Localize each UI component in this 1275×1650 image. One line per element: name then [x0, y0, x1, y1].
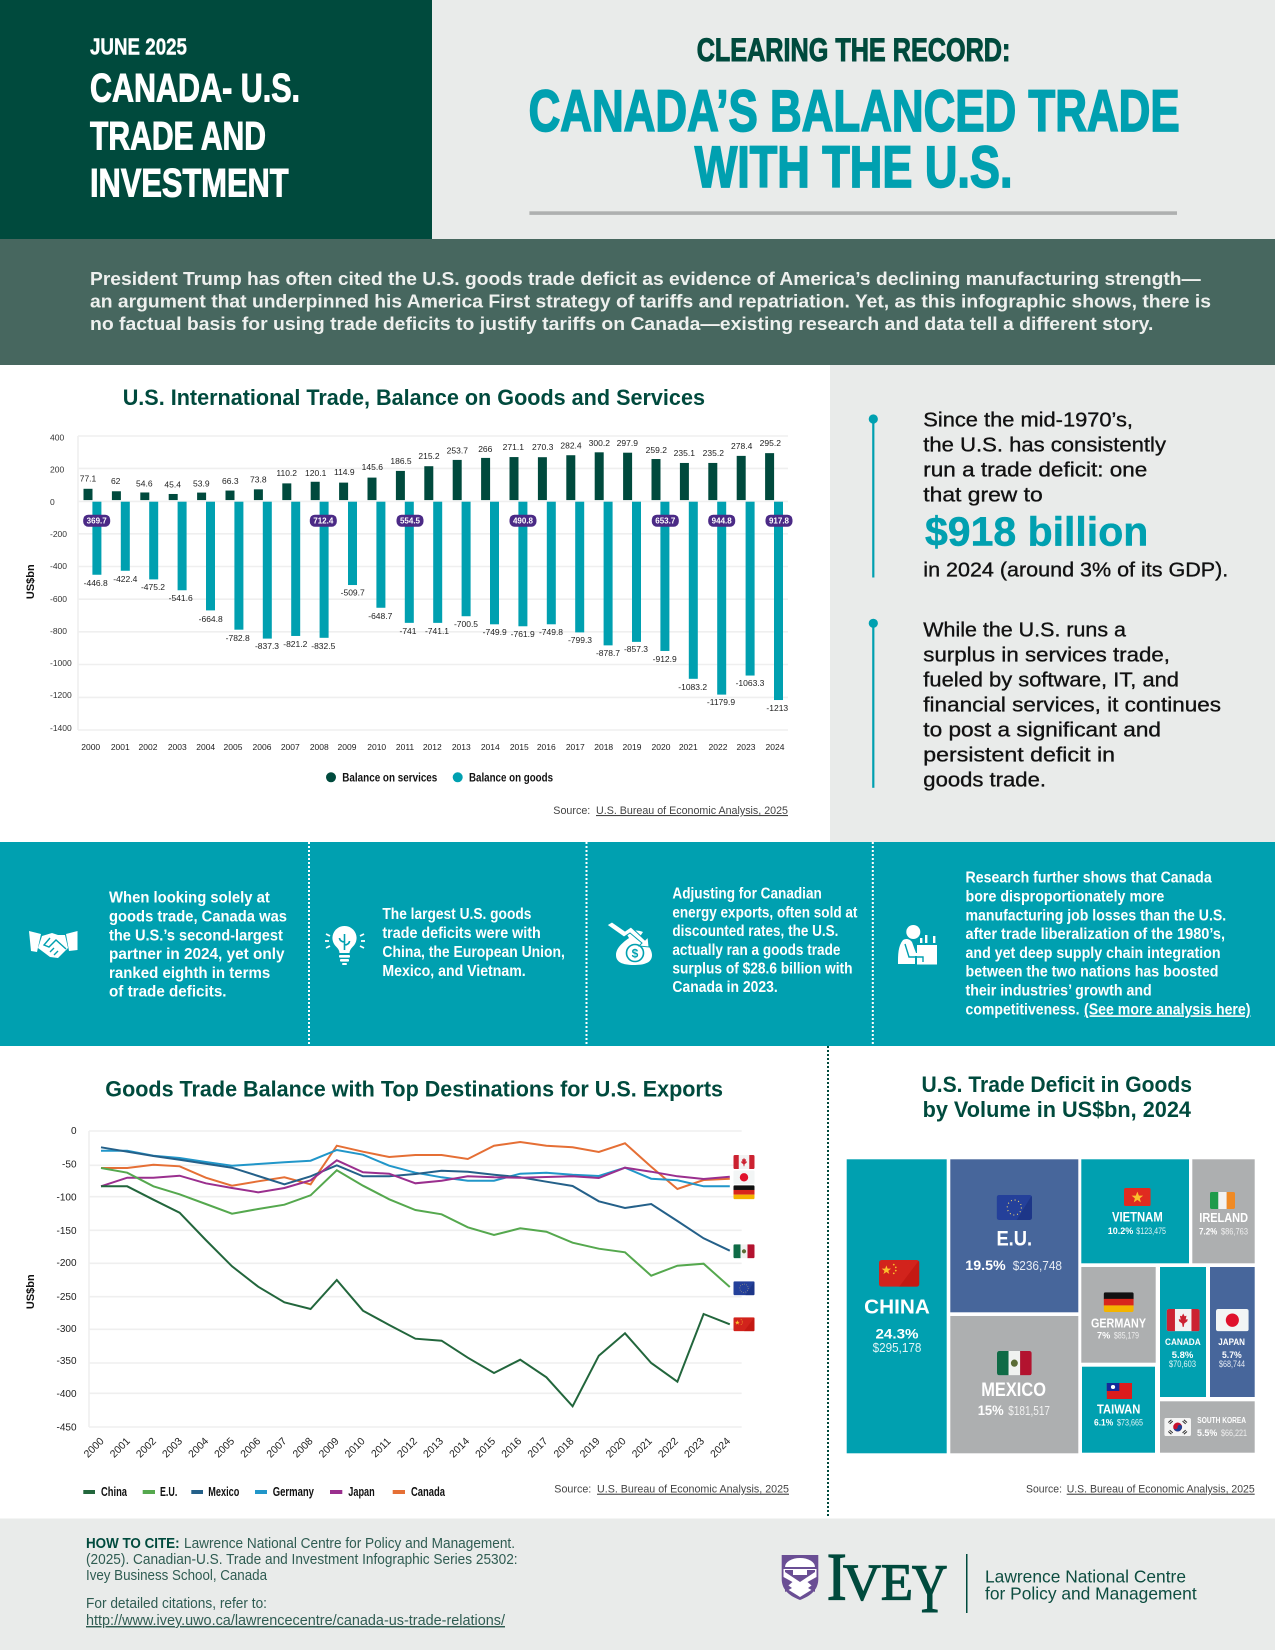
y axis labels: -250 — [56, 1292, 77, 1303]
main heading: WITH THE U.S. — [695, 135, 1012, 200]
x axis years: 2008 — [290, 1435, 316, 1460]
tile: Ireland: 7.2% — [1199, 1227, 1218, 1238]
services value labels: 297.9 — [617, 438, 638, 448]
fact: largest deficits: trade deficits were with — [382, 925, 541, 942]
fact: goods surplus with Canada: surplus of $28.6 billion with — [672, 960, 852, 978]
tile: Taiwan: TAIWAN — [1097, 1401, 1140, 1416]
fact: second-largest partner: When looking solely at — [109, 890, 270, 907]
trade deficit callout pills: 490.8 — [513, 517, 534, 526]
series title — [90, 67, 300, 206]
marker line 1 — [869, 414, 878, 578]
goods value labels: -821.2 — [283, 639, 308, 649]
fact: job losses research: bore disproportionately more — [966, 888, 1164, 906]
trade deficit callout pills: 653.7 — [655, 517, 676, 526]
x axis years: 2006 — [238, 1435, 263, 1460]
logo: Ivey wordmark: Y — [912, 1551, 948, 1628]
icon: light bulb with leaves — [325, 926, 365, 965]
x axis years — [81, 742, 785, 752]
panel: introduction band — [0, 239, 1275, 365]
heading: treemap title: by Volume in US$bn, 2024 — [923, 1097, 1192, 1122]
source note: line chart: U.S. Bureau of Economic Analysis, 2025 — [597, 1484, 789, 1496]
fact: goods surplus with Canada: Canada in 2023. — [672, 979, 778, 996]
trade deficit callout pills: 944.8 — [712, 517, 732, 526]
fact: largest deficits: Mexico, and Vietnam. — [382, 963, 526, 980]
intro text: no factual basis for using trade deficits to justify tariffs on Canada—existing research and data tell a different story. — [90, 313, 1153, 334]
chart legend: Balance on goods — [469, 772, 553, 784]
tile: South Korea: 5.5% — [1197, 1428, 1218, 1439]
chart legend: Mexico — [208, 1485, 240, 1499]
x axis years: 2017 — [566, 742, 585, 752]
services bars — [84, 452, 774, 500]
services value labels: 235.1 — [674, 448, 695, 458]
logo: Ivey wordmark: VE — [843, 1554, 913, 1611]
tile: Ireland — [1192, 1159, 1255, 1263]
tile: E.U.: $236,748 — [1013, 1258, 1062, 1273]
chart legend — [326, 772, 553, 784]
x axis years: 2017 — [525, 1435, 550, 1460]
services value labels — [80, 438, 781, 489]
logo: Lawrence National Centre text: Lawrence National Centre — [985, 1566, 1186, 1586]
tile: Vietnam: VIETNAM — [1112, 1209, 1163, 1224]
goods value labels: -446.8 — [84, 578, 108, 588]
y axis labels: -150 — [56, 1226, 77, 1237]
line: Japan — [101, 1160, 730, 1192]
goods value labels: -1179.9 — [707, 697, 735, 707]
goods value labels: -782.8 — [226, 633, 250, 643]
heading: line chart title: Goods Trade Balance with Top Destinations for U.S. Exports — [105, 1076, 723, 1101]
services value labels: 235.2 — [703, 448, 724, 458]
bar chart: balance on goods and services — [25, 432, 792, 784]
tile: Canada — [1160, 1267, 1206, 1397]
icon: money bag with falling arrow: $ — [632, 946, 639, 960]
x axis years: 2021 — [679, 742, 698, 752]
services value labels: 73.8 — [250, 474, 267, 484]
tile: Vietnam: 10.2% — [1108, 1226, 1134, 1237]
y axis labels: -350 — [56, 1356, 77, 1367]
chart legend: E.U. — [160, 1485, 177, 1499]
icon: money bag with falling arrow — [607, 922, 652, 965]
finding: persistent deficit: in 2024 (around 3% of its GDP). — [923, 559, 1228, 582]
tile: China: 24.3% — [876, 1325, 919, 1341]
x axis years: 2016 — [499, 1435, 524, 1460]
fact: goods surplus with Canada: energy exports, often sold at — [672, 904, 858, 921]
x axis years: 2014 — [447, 1435, 472, 1460]
source note: treemap: U.S. Bureau of Economic Analysis, 2025 — [1067, 1484, 1255, 1496]
panel: teal facts band — [0, 842, 1275, 1046]
finding: persistent deficit: that grew to — [923, 484, 1043, 507]
fact: job losses research: after trade liberalization of the 1980’s, — [966, 926, 1225, 943]
services value labels: 186.5 — [390, 456, 412, 466]
goods value labels: -799.3 — [568, 635, 592, 645]
goods value labels: -749.9 — [483, 627, 507, 637]
x axis years: 2009 — [317, 1435, 342, 1460]
fact: goods surplus with Canada — [672, 886, 858, 996]
fact: job losses research: competitiveness. — [966, 1001, 1080, 1018]
heading: treemap title — [922, 1072, 1192, 1122]
goods value labels: -1063.3 — [736, 678, 765, 688]
goods value labels: -648.7 — [368, 611, 393, 621]
services value labels: 295.2 — [760, 438, 781, 448]
x axis years: 2001 — [108, 1435, 133, 1460]
fact: job losses research: their industries’ growth and — [966, 982, 1152, 1000]
x axis years: 2014 — [481, 742, 500, 752]
fact: largest deficits: The largest U.S. goods — [382, 906, 531, 923]
finding: services surplus: While the U.S. runs a — [923, 619, 1127, 642]
panel: main title — [432, 0, 1275, 239]
tile: Taiwan — [1082, 1367, 1155, 1453]
marker line 2 — [869, 619, 878, 788]
services value labels: 270.3 — [532, 442, 554, 452]
fact: goods surplus with Canada: discounted rates, the U.S. — [672, 923, 838, 940]
finding: services surplus: surplus in services trade, — [923, 644, 1170, 667]
y axis labels: -300 — [56, 1324, 77, 1335]
x axis years: 2020 — [652, 742, 671, 752]
finding: persistent deficit — [923, 409, 1228, 582]
tile: Japan: JAPAN — [1218, 1337, 1245, 1348]
source note: bar chart: Source: — [553, 805, 590, 817]
x axis years: 2022 — [709, 742, 728, 752]
tile: China: $295,178 — [873, 1340, 921, 1355]
x axis years — [82, 1435, 733, 1460]
goods value labels: -878.7 — [596, 648, 620, 658]
tile: South Korea — [1160, 1401, 1255, 1453]
services value labels: 215.2 — [418, 451, 440, 461]
x axis years: 2002 — [139, 742, 158, 752]
services value labels: 45.4 — [164, 479, 181, 489]
goods value labels: -741 — [399, 626, 417, 636]
tile: Germany — [1081, 1267, 1156, 1363]
services value labels: 145.6 — [362, 462, 383, 472]
source note: line chart: Source: — [554, 1484, 591, 1496]
citation text: http://www.ivey.uwo.ca/lawrencecentre/canada-us-trade-relations/ — [86, 1613, 506, 1629]
services value labels: 62 — [111, 476, 121, 486]
x axis years: 2015 — [473, 1435, 498, 1460]
x axis years: 2018 — [594, 742, 613, 752]
fact: largest deficits: China, the European Union, — [382, 944, 565, 961]
x axis years: 2007 — [281, 742, 300, 752]
y axis labels: -200 — [56, 1258, 77, 1269]
services value labels: 253.7 — [447, 445, 468, 455]
tile: Canada: CANADA — [1165, 1337, 1201, 1348]
goods value labels: -700.5 — [454, 619, 478, 629]
citation text: (2025). Canadian-U.S. Trade and Investment Infographic Series 25302: — [86, 1552, 518, 1568]
chart legend: China — [101, 1485, 128, 1499]
panel: key findings — [830, 365, 1275, 842]
x axis years: 2004 — [186, 1435, 211, 1460]
chart legend: Canada — [411, 1485, 446, 1499]
trade deficit callout pills: 369.7 — [87, 517, 107, 526]
x axis years: 2016 — [537, 742, 556, 752]
y axis title: US$bn — [25, 1274, 37, 1309]
services value labels: 66.3 — [222, 476, 239, 486]
goods value labels: -664.8 — [199, 614, 223, 624]
tile: Mexico: $181,517 — [1008, 1403, 1050, 1418]
x axis years: 2003 — [168, 742, 187, 752]
line: Canada — [101, 1142, 730, 1189]
goods value labels: -475.2 — [141, 582, 165, 592]
chart legend: Japan — [348, 1485, 375, 1499]
services value labels: 282.4 — [560, 440, 582, 450]
tile: Taiwan: $73,665 — [1117, 1418, 1143, 1428]
fact: second-largest partner: goods trade, Canada was — [109, 908, 287, 926]
finding: persistent deficit: run a trade deficit: one — [923, 459, 1147, 482]
goods value labels: -912.9 — [653, 654, 677, 664]
chart legend: Germany — [273, 1485, 314, 1499]
y axis labels — [50, 432, 72, 733]
tile: Ireland: IRELAND — [1199, 1210, 1248, 1225]
x axis years: 2002 — [134, 1435, 159, 1460]
services value labels: 278.4 — [731, 441, 753, 451]
tile: Taiwan: 6.1% — [1094, 1418, 1114, 1429]
y axis labels: -50 — [62, 1160, 77, 1171]
tile: Ireland: $86,763 — [1221, 1227, 1248, 1237]
services value labels: 120.1 — [305, 468, 327, 478]
treemap: U.S. trade deficit by country — [847, 1159, 1255, 1453]
x axis years: 2019 — [578, 1435, 603, 1460]
services value labels: 110.2 — [276, 468, 297, 478]
series title: TRADE AND — [90, 115, 266, 159]
finding: persistent deficit: the U.S. has consistently — [923, 434, 1167, 457]
fact: second-largest partner: partner in 2024, yet only — [109, 946, 285, 963]
tile: Canada: 5.8% — [1172, 1350, 1194, 1361]
tile: Canada: $70,603 — [1169, 1359, 1196, 1369]
y axis labels: -1400 — [50, 723, 72, 733]
services value labels: 300.2 — [589, 438, 610, 448]
date: JUNE 2025 — [90, 34, 187, 60]
x axis years: 2022 — [656, 1435, 681, 1460]
citation text: For detailed citations, refer to: — [86, 1596, 267, 1612]
citation text: Lawrence National Centre for Policy and Management. — [184, 1536, 515, 1552]
x axis years: 2018 — [551, 1435, 577, 1460]
x axis years: 2005 — [224, 742, 243, 752]
line: China — [101, 1186, 730, 1406]
fact: goods surplus with Canada: actually ran a goods trade — [672, 942, 840, 959]
y axis labels: -450 — [56, 1423, 77, 1434]
x axis years: 2003 — [160, 1435, 185, 1460]
fact: goods surplus with Canada: Adjusting for Canadian — [672, 886, 822, 903]
finding: services surplus: financial services, it continues — [923, 694, 1221, 717]
heading: treemap title: U.S. Trade Deficit in Goods — [922, 1072, 1192, 1097]
services value labels: 54.6 — [136, 478, 153, 488]
x axis years: 2012 — [395, 1435, 420, 1460]
y axis labels: -400 — [50, 561, 67, 571]
tile: Mexico — [950, 1316, 1078, 1453]
x axis years: 2013 — [421, 1435, 446, 1460]
trade deficit callout pills: 554.5 — [400, 517, 421, 526]
x axis years: 2008 — [310, 742, 329, 752]
citation text — [86, 1536, 518, 1629]
x axis years: 2000 — [81, 742, 100, 752]
x axis years: 2000 — [82, 1435, 107, 1460]
x axis years: 2021 — [630, 1435, 655, 1460]
fact: job losses research: and yet deep supply chain integration — [966, 945, 1221, 962]
intro text — [90, 268, 1211, 334]
tile: Germany: 7% — [1097, 1331, 1111, 1342]
x axis years: 2004 — [196, 742, 215, 752]
goods value labels: -761.9 — [511, 629, 535, 639]
tile: Mexico: MEXICO — [981, 1380, 1046, 1401]
x axis years: 2007 — [264, 1435, 289, 1460]
big number: $918 billion — [925, 509, 1148, 555]
series title: CANADA- U.S. — [90, 67, 300, 111]
finding: services surplus: persistent deficit in — [923, 744, 1115, 767]
goods value labels: -422.4 — [113, 574, 138, 584]
fact: second-largest partner: ranked eighth in terms — [109, 965, 270, 982]
goods value labels: -741.1 — [425, 626, 449, 636]
source note: bar chart: U.S. Bureau of Economic Analysis, 2025 — [596, 805, 788, 817]
x axis years: 2005 — [212, 1435, 237, 1460]
y axis labels: -1200 — [50, 690, 72, 700]
logo: Lawrence National Centre text: for Policy and Management — [985, 1583, 1197, 1603]
x axis years: 2015 — [510, 742, 529, 752]
x axis years: 2024 — [708, 1435, 733, 1460]
logo: Ivey crest — [782, 1555, 818, 1600]
y axis title: US$bn — [25, 564, 37, 599]
services value labels: 77.1 — [80, 473, 97, 483]
x axis years: 2001 — [111, 742, 130, 752]
finding: services surplus: goods trade. — [923, 769, 1046, 792]
y axis labels: -400 — [56, 1389, 77, 1400]
line: E.U. — [101, 1168, 730, 1287]
line: Germany — [101, 1150, 730, 1186]
y axis labels: 200 — [50, 464, 64, 474]
goods value labels: -541.6 — [169, 593, 193, 603]
y axis labels: 400 — [50, 432, 64, 442]
tile: Vietnam — [1081, 1159, 1189, 1263]
x axis years: 2011 — [369, 1436, 394, 1460]
fact: job losses research: (See more analysis here) — [1084, 1001, 1250, 1018]
x axis years: 2019 — [623, 742, 642, 752]
line: Mexico — [101, 1147, 730, 1251]
x axis years: 2006 — [253, 742, 272, 752]
fact: job losses research: manufacturing job losses than the U.S. — [966, 907, 1226, 924]
goods value labels: -1083.2 — [678, 682, 707, 692]
main heading — [529, 79, 1180, 200]
flags at line ends — [734, 1155, 754, 1331]
goods value labels: -837.3 — [255, 641, 279, 651]
y axis labels: 0 — [50, 497, 55, 507]
finding: persistent deficit: Since the mid-1970’s, — [923, 409, 1133, 432]
x axis years: 2011 — [396, 742, 414, 752]
trade deficit callout pills: 712.4 — [313, 517, 334, 526]
chart legend: Balance on services — [342, 772, 437, 784]
citation text: Ivey Business School, Canada — [86, 1568, 268, 1584]
x axis years: 2010 — [343, 1435, 368, 1460]
panel: header date and series title — [0, 0, 432, 239]
heading: bar chart title: U.S. International Trade, Balance on Goods and Services — [123, 385, 705, 410]
tile: China: CHINA — [864, 1296, 930, 1318]
intro text: President Trump has often cited the U.S. goods trade deficit as evidence of America’s declining manufacturing strength— — [90, 268, 1201, 289]
goods value labels: -1213 — [766, 703, 788, 713]
goods bars — [92, 502, 783, 700]
tile: E.U. — [950, 1159, 1078, 1312]
y axis labels — [56, 1126, 77, 1434]
goods value labels: -832.5 — [311, 641, 336, 651]
y axis labels: -100 — [56, 1193, 77, 1204]
x axis years: 2009 — [338, 742, 357, 752]
tile: E.U.: E.U. — [996, 1228, 1032, 1251]
finding: services surplus: to post a significant and — [923, 719, 1161, 742]
goods value labels: -857.3 — [624, 644, 648, 654]
chart legend — [83, 1485, 446, 1499]
fact: second-largest partner: of trade deficits. — [109, 984, 226, 1001]
fact: largest deficits — [382, 906, 565, 980]
finding: services surplus: fueled by software, IT, and — [923, 669, 1179, 692]
panel: footer — [0, 1518, 1275, 1650]
x axis years: 2012 — [423, 742, 442, 752]
series title: INVESTMENT — [90, 162, 289, 206]
services value labels: 271.1 — [503, 442, 524, 452]
services value labels: 266 — [478, 444, 493, 454]
intro text: an argument that underpinned his America First strategy of tariffs and repatriation. Yet, as this infographic shows, there is — [90, 290, 1211, 311]
x axis years: 2024 — [766, 742, 785, 752]
tile: Japan — [1210, 1267, 1255, 1397]
trade deficit callout pills: 917.8 — [769, 517, 790, 526]
citation text: HOW TO CITE: — [86, 1536, 180, 1552]
services value labels: 53.9 — [193, 479, 210, 489]
tile: Germany: $85,179 — [1114, 1331, 1139, 1341]
y axis labels: -200 — [50, 529, 67, 539]
tile: E.U.: 19.5% — [965, 1257, 1006, 1273]
logo: Ivey wordmark: I — [827, 1538, 847, 1614]
services value labels: 259.2 — [646, 445, 667, 455]
fact: job losses research — [966, 870, 1250, 1018]
x axis years: 2020 — [604, 1435, 629, 1460]
line chart: goods trade balance — [25, 1126, 754, 1499]
services value labels: 114.9 — [334, 467, 355, 477]
tile: Vietnam: $123,475 — [1136, 1226, 1166, 1236]
tile: Germany: GERMANY — [1091, 1315, 1146, 1330]
tile: China — [847, 1159, 947, 1453]
y axis labels: -600 — [50, 594, 67, 604]
y axis labels: 0 — [71, 1126, 77, 1137]
y axis labels: -1000 — [50, 658, 72, 668]
logo: Lawrence National Centre text — [985, 1566, 1197, 1603]
y axis labels: -800 — [50, 626, 67, 636]
x axis years: 2013 — [452, 742, 471, 752]
tile: South Korea: SOUTH KOREA — [1197, 1416, 1246, 1425]
icon: handshake — [29, 931, 78, 958]
tile: Japan: 5.7% — [1222, 1350, 1242, 1361]
tile: Japan: $68,744 — [1219, 1359, 1245, 1369]
tile: South Korea: $66,221 — [1221, 1428, 1247, 1438]
x axis years: 2023 — [682, 1435, 707, 1460]
finding: services surplus — [923, 619, 1221, 792]
kicker heading: CLEARING THE RECORD: — [697, 32, 1010, 68]
goods value labels — [84, 574, 788, 713]
logo: Ivey wordmark — [827, 1538, 948, 1628]
x axis years: 2010 — [367, 742, 386, 752]
source note: treemap: Source: — [1026, 1484, 1062, 1496]
fact: second-largest partner: the U.S.’s second-largest — [109, 927, 284, 944]
x axis years: 2023 — [737, 742, 756, 752]
goods value labels: -749.8 — [539, 627, 563, 637]
fact: job losses research: between the two nations has boosted — [966, 964, 1218, 981]
fact: second-largest partner — [109, 890, 287, 1001]
fact: job losses research: Research further shows that Canada — [966, 870, 1212, 887]
tile: Mexico: 15% — [978, 1402, 1004, 1418]
icon: worker at desk — [898, 925, 937, 964]
goods value labels: -509.7 — [341, 588, 365, 598]
trade deficit callout pills — [83, 515, 792, 527]
